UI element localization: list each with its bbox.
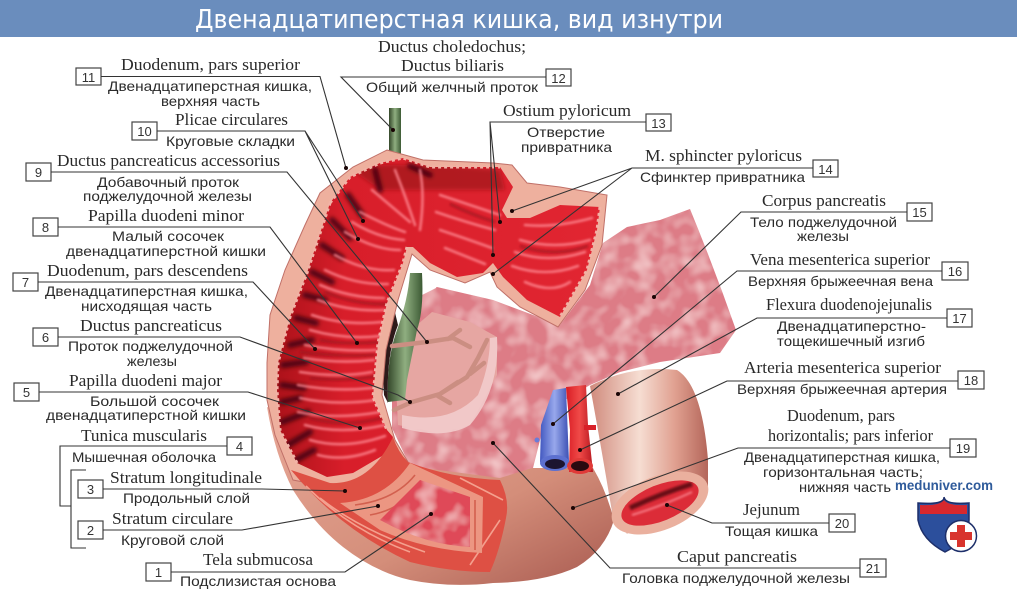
label 7: 7 [22, 275, 29, 290]
bracket: muscle layers [71, 470, 86, 548]
label 2 [78, 504, 380, 548]
label 21: Caput pancreatis [677, 547, 797, 566]
label 8: 8 [42, 220, 49, 235]
label 1: 1 [155, 565, 162, 580]
label 20: Тощая кишка [725, 523, 818, 539]
common bile duct, lower segment [388, 273, 422, 402]
label 21: Головка поджелудочной железы [622, 570, 850, 586]
label 8 [33, 206, 359, 345]
label 5: Большой сосочек [90, 393, 220, 409]
common bile duct, upper segment [389, 108, 401, 154]
pale area behind the papilla [394, 312, 497, 433]
duodenal wall [267, 150, 607, 487]
label 5: 5 [23, 385, 30, 400]
label 18 [578, 358, 984, 452]
label 5: Papilla duodeni major [69, 371, 222, 390]
label 15: Тело поджелудочной [750, 214, 897, 230]
label 2: Круговой слой [121, 532, 224, 548]
mucosal serrated edge [277, 158, 600, 463]
label 10: 10 [137, 124, 152, 139]
pancreatic duct branches [392, 330, 487, 410]
label 6: Ductus pancreaticus [80, 316, 222, 335]
label 12: Ductus choledochus; [378, 37, 526, 56]
label 4: 4 [236, 439, 243, 454]
label 11: 11 [82, 70, 95, 85]
label 8: Малый сосочек [112, 228, 225, 244]
label 3: 3 [87, 482, 94, 497]
label 15: железы [797, 228, 849, 244]
label 7: нисходящая часть [81, 298, 212, 314]
label 9: Добавочный проток [97, 174, 240, 190]
label 16: 16 [948, 264, 962, 279]
label 9: 9 [35, 165, 42, 180]
label 21: 21 [866, 561, 880, 576]
label 18: Верхняя брыжеечная артерия [737, 381, 947, 397]
circular layer [340, 463, 483, 553]
mucosa with circular folds [270, 150, 610, 485]
label 10: Plicae circulares [175, 110, 288, 129]
label 11 [76, 55, 348, 170]
label 5 [14, 371, 362, 430]
label 20: Jejunum [743, 500, 800, 519]
label 15: 15 [912, 205, 927, 220]
label 8: двенадцатиперстной кишки [66, 243, 266, 259]
label 5: двенадцатиперстной кишки [46, 407, 246, 423]
white gap [402, 275, 440, 305]
longitudinal layer [291, 437, 507, 572]
label 1: Подслизистая основа [180, 573, 336, 589]
muscle layers cut-out [291, 437, 507, 572]
label 10 [132, 110, 365, 241]
label 12: 12 [551, 71, 566, 86]
label 19: нижняя часть [799, 479, 891, 495]
label 17: Двенадцатиперстно- [777, 318, 926, 334]
label 20: 20 [835, 516, 849, 531]
label 1 [146, 512, 433, 589]
label 7: Duodenum, pars descendens [47, 261, 248, 280]
label 3: Stratum longitudinale [110, 468, 262, 487]
label 11: Двенадцатиперстная кишка, [108, 78, 312, 94]
label 4 [60, 426, 252, 506]
label 19: горизонтальная часть; [763, 464, 923, 480]
label 13: 13 [651, 116, 666, 131]
label 9: поджелудочной железы [83, 188, 252, 204]
label 19 [571, 406, 976, 510]
label 15: Corpus pancreatis [762, 191, 886, 210]
label 8: Papilla duodeni minor [88, 206, 244, 225]
label 13: Ostium pyloricum [503, 101, 631, 120]
label 6: 6 [42, 330, 49, 345]
label 20 [665, 500, 855, 539]
label 15 [652, 191, 932, 299]
label 4: Мышечная оболочка [72, 449, 216, 465]
label 14: M. sphincter pyloricus [645, 146, 802, 165]
label 7 [13, 261, 317, 351]
label 6 [33, 316, 412, 404]
jejunum tube [590, 369, 708, 534]
label 11: Duodenum, pars superior [121, 55, 300, 74]
label 10: Круговые складки [166, 133, 295, 149]
horizontal part of the duodenum [267, 407, 614, 585]
label 18: 18 [964, 373, 978, 388]
label 12: Общий желчный проток [366, 79, 539, 95]
anatomical illustration [267, 108, 736, 585]
label 19: 19 [956, 441, 970, 456]
logo: meduniver: meduniver.com [895, 478, 993, 493]
jejunum opening [603, 459, 717, 547]
label 2: 2 [87, 523, 94, 538]
submucosa [380, 480, 470, 547]
title bar: Двенадцатиперстная кишка, вид изнутри [195, 5, 723, 35]
label 14 [491, 146, 838, 276]
label 14: Сфинктер привратника [640, 169, 805, 185]
label 13: Отверстие [527, 124, 605, 140]
label 21 [491, 441, 886, 586]
label 12: Ductus biliaris [401, 56, 504, 75]
label 11: верхняя часть [161, 93, 260, 109]
label 17: 17 [952, 311, 967, 326]
label 17: Flexura duodenojejunalis [766, 295, 932, 314]
label 12 [341, 37, 571, 132]
label 13 [490, 101, 671, 257]
label 9 [26, 151, 429, 344]
label 19: Двенадцатиперстная кишка, [744, 449, 940, 465]
label 18: Arteria mesenterica superior [744, 358, 941, 377]
label 16: Vena mesenterica superior [750, 250, 930, 269]
label 6: Проток поджелудочной [68, 338, 233, 354]
label 9: Ductus pancreaticus accessorius [57, 151, 280, 170]
pancreas [392, 209, 736, 482]
label 17: тощекишечный изгиб [777, 333, 925, 349]
label 17 [616, 295, 972, 396]
label 1: Tela submucosa [203, 550, 313, 569]
label 3 [78, 468, 347, 506]
label 14: 14 [818, 162, 833, 177]
label 6: железы [127, 353, 177, 369]
label 16 [551, 250, 968, 426]
superior mesenteric vein [534, 388, 570, 471]
icon: shield with cross [918, 497, 976, 552]
superior mesenteric artery [566, 385, 596, 474]
title bar [0, 0, 1017, 37]
label 13: привратника [521, 139, 612, 155]
label 16: Верхняя брыжеечная вена [748, 273, 933, 289]
label 19: Duodenum, pars [787, 406, 895, 425]
label 7: Двенадцатиперстная кишка, [45, 283, 248, 299]
label 2: Stratum circulare [112, 509, 233, 528]
label 3: Продольный слой [123, 490, 250, 506]
label 4: Tunica muscularis [81, 426, 207, 445]
logo: meduniver [895, 478, 993, 552]
label 19: horizontalis; pars inferior [768, 426, 933, 445]
